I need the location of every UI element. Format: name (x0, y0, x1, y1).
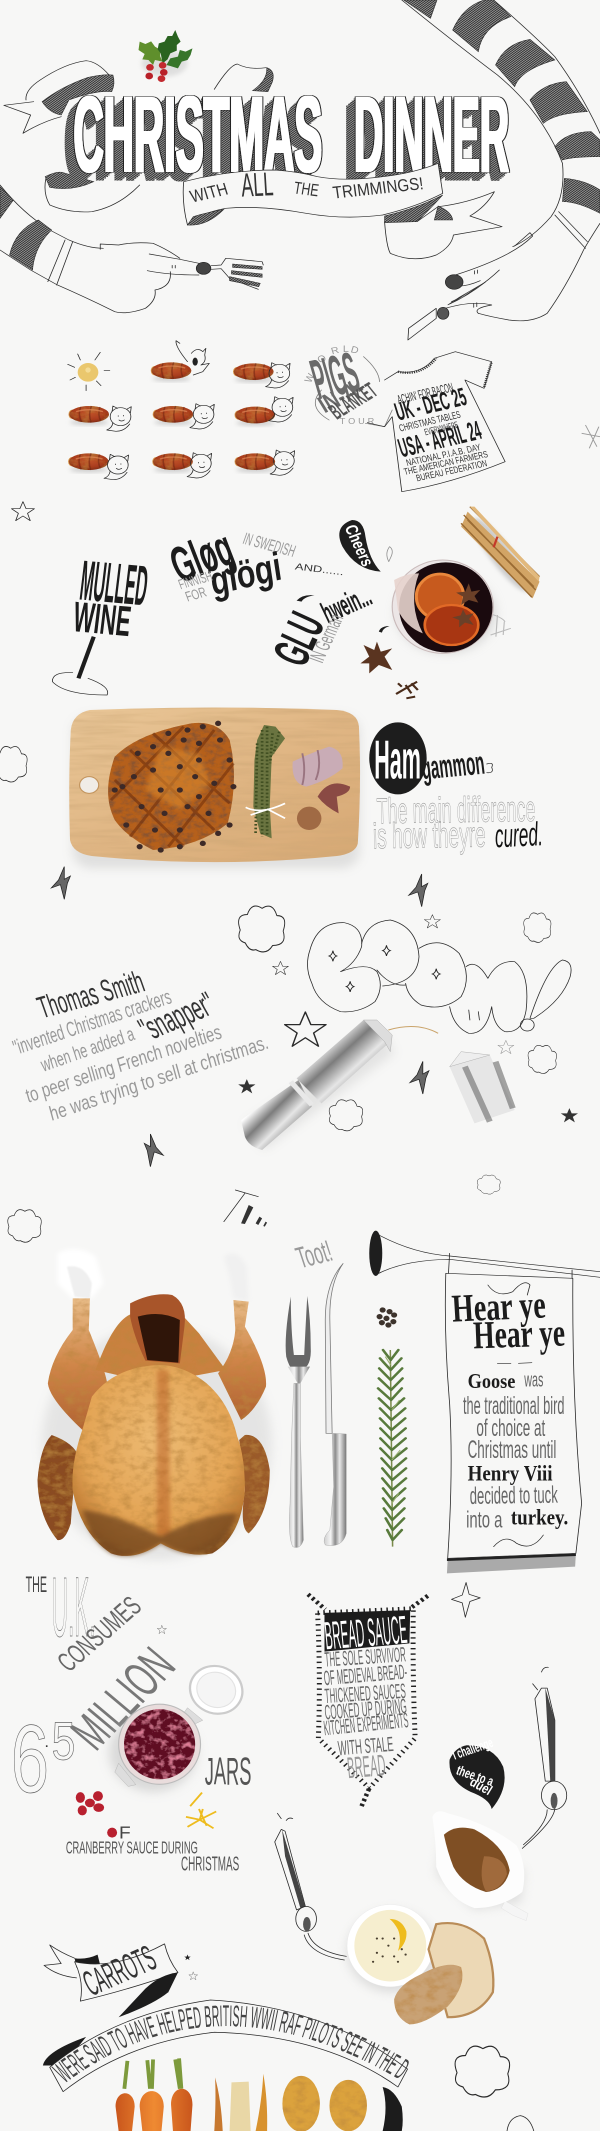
title (64, 95, 510, 182)
bread sauce banner: BREAD (346, 1748, 387, 1785)
Thomas Smith text: Thomas Smith (33, 964, 149, 1025)
world tour badge: D (349, 345, 360, 356)
doodle star (11, 502, 34, 521)
challenge speech bubble: duel (467, 1774, 495, 1798)
glog and glogi lettering: Gløg (160, 520, 243, 594)
Thomas Smith text: "snapper" (132, 985, 222, 1048)
carving knife (324, 1263, 346, 1546)
cracker end piece (450, 1052, 515, 1123)
pig in blanket 1 (151, 341, 209, 381)
pig in blanket 5 (235, 397, 293, 426)
t-shirt with dates: EVERYWHERE (423, 420, 460, 438)
proclamation scroll: Hear ye (451, 1283, 547, 1331)
gluhwein lettering (262, 579, 390, 672)
challenge speech bubble (449, 1734, 505, 1809)
t-shirt with dates: ACHIN' FOR BACON (395, 380, 455, 407)
carrots arc ribbon (42, 2000, 409, 2131)
UK consumes statistic: U.K. (52, 1561, 96, 1655)
rosemary sprig (378, 1350, 406, 1547)
gluhwein lettering: IN German (305, 612, 349, 666)
world tour badge: IN-A- (313, 376, 370, 418)
UK consumes statistic: CHRISTMAS (181, 1852, 239, 1875)
subtitle ribbon: WITH (187, 179, 230, 206)
world tour badge: BLANKET (324, 379, 383, 425)
Thomas Smith text: "invented Christmas crackers (8, 985, 175, 1059)
pig in blanket 6 (68, 453, 129, 480)
cheers speech drop: Cheers (340, 522, 377, 569)
lower left doodle cloud (0, 746, 27, 782)
holly sprig (139, 30, 192, 82)
gluhwein lettering: GLU (262, 607, 337, 672)
header section (0, 0, 600, 340)
world tour badge: O (316, 353, 329, 366)
toot lettering (224, 1190, 336, 1275)
cranberry, sauces and carrots section: THE SOLE SURVIVOR (324, 1643, 407, 1671)
UK consumes statistic: 6 (11, 1705, 49, 1813)
pig in blanket 7 (152, 453, 212, 478)
carrots (116, 2058, 192, 2131)
jar of cranberry sauce (109, 1656, 252, 1792)
UK consumes statistic (11, 1561, 251, 1875)
trumpet (369, 1231, 600, 1277)
peppercorns (380, 1310, 394, 1325)
ham and crackers section: cured. (494, 815, 544, 855)
bread sauce banner (308, 1594, 428, 1806)
proclamation scroll: turkey. (511, 1506, 568, 1530)
cranberry, sauces and carrots section (11, 1561, 568, 2131)
world tour badge: PIGS (304, 340, 366, 411)
world tour badge: R (330, 345, 340, 357)
right striped sleeve arm (402, 0, 600, 321)
ham and crackers section (0, 707, 578, 1167)
cranberry, sauces and carrots section: KITCHEN EXPERIMENTS (322, 1709, 410, 1740)
solid stars (238, 1079, 578, 1122)
glog and glogi lettering: FINNISH (176, 569, 215, 593)
world tour badge (303, 340, 392, 427)
t-shirt with dates: CHRISTMAS TABLES (398, 409, 462, 434)
challenge speech bubble: I challenge (450, 1734, 495, 1762)
BOOM lettering (307, 920, 571, 1033)
mulled wine glass lettering (52, 549, 151, 695)
lower right ribbon (385, 192, 502, 259)
glog and glogi lettering: AND...... (294, 562, 344, 578)
proclamation scroll (445, 1253, 582, 1573)
bread slices (394, 1923, 493, 2024)
turkey section (8, 1175, 600, 1573)
mulled wine glass lettering: WINE (71, 592, 134, 645)
pig in blanket 2 (233, 363, 290, 388)
right sword (522, 1667, 567, 1848)
mustard sun (68, 352, 110, 391)
orange zest star (186, 1793, 216, 1828)
proclamation scroll: Henry Viii (468, 1462, 553, 1486)
carrots ribbon (44, 1937, 198, 2017)
glog and glogi lettering (160, 520, 344, 605)
t-shirt with dates: THE AMERICAN FARMERS (403, 450, 489, 478)
Christmas cracker (241, 1020, 438, 1150)
pigs and mulled wine section: MULLED (77, 549, 151, 617)
subtitle ribbon: ALL (240, 166, 274, 204)
bread sauce bowl (347, 1905, 437, 1992)
glog and glogi lettering: IN SWEDISH (241, 529, 298, 561)
left hand holding fork (100, 243, 263, 289)
glog and glogi lettering: FOR (183, 584, 209, 605)
UK consumes statistic: F (119, 1822, 131, 1842)
world tour badge: TOUR (340, 417, 374, 426)
cranberry, sauces and carrots section: JARS (205, 1749, 251, 1793)
world tour badge: L (343, 345, 349, 355)
t-shirt with dates: BUREAU FEDERATION (415, 459, 488, 484)
carrots ribbon: CARROTS (76, 1937, 162, 2003)
cranberry, sauces and carrots section: THICKENED SAUCES (324, 1679, 407, 1708)
loose cranberries (76, 1791, 117, 1838)
doodle clouds (8, 1175, 500, 1242)
Thomas Smith text: he was trying to sell at christmas. (45, 1031, 272, 1125)
toot lettering: Toot! (292, 1234, 336, 1275)
left striped sleeve arm (0, 185, 170, 313)
upper left ribbon (4, 61, 114, 133)
pigs and mulled wine section (11, 340, 600, 698)
roast turkey (37, 1249, 272, 1560)
cinnamon sticks (461, 507, 540, 598)
proclamation scroll: Goose (468, 1369, 516, 1393)
glog and glogi lettering: glögi (203, 544, 288, 603)
star anise and cloves (360, 642, 418, 698)
cranberry, sauces and carrots section: COOKED UP DURING (324, 1695, 408, 1724)
main difference note (372, 789, 544, 857)
lightning bolt doodles (51, 867, 429, 1167)
mug of mulled wine (392, 560, 511, 653)
Thomas Smith text (8, 964, 272, 1125)
right hand holding knife (408, 233, 533, 340)
parsnips (214, 2074, 267, 2131)
subtitle ribbon: TRIMMINGS! (331, 173, 425, 202)
UK consumes statistic: MILLION (60, 1637, 186, 1760)
subtitle ribbon: THE (293, 178, 320, 200)
proclamation scroll: was (524, 1369, 543, 1391)
t-shirt with dates (367, 352, 505, 492)
Thomas Smith text: when he added a (37, 1024, 138, 1076)
UK consumes statistic: THE (26, 1572, 47, 1597)
ham gammon lettering: Ham (374, 728, 421, 790)
snowflake (582, 425, 600, 448)
subtitle ribbon (183, 163, 443, 225)
Thomas Smith text: to peer selling French novelties (21, 1021, 225, 1107)
cranberry, sauces and carrots section: OF MEDIEVAL BREAD- (323, 1660, 408, 1690)
ham on chopping board (69, 707, 360, 868)
world tour badge: W (303, 372, 318, 385)
carving fork (286, 1296, 311, 1547)
lower left ribbon (45, 172, 140, 212)
cheers speech drop (339, 520, 392, 572)
gluhwein lettering: hwein... (314, 579, 378, 629)
gravy boat (432, 1811, 528, 1921)
UK consumes statistic: CONSUMES (51, 1591, 147, 1677)
pig in blanket 8 (235, 450, 295, 475)
pig in blanket 4 (153, 404, 214, 429)
sparkle star (452, 1583, 480, 1617)
challenge speech bubble: thee to a (454, 1762, 496, 1789)
t-shirt with dates: NATIONAL P.I.A.B. DAY (405, 443, 482, 469)
doodle clouds (455, 2046, 534, 2131)
pig in blanket 3 (68, 406, 131, 431)
ham and crackers section: gammon (419, 745, 487, 787)
left sword (275, 1813, 346, 1960)
UK consumes statistic: 5 (52, 1711, 75, 1771)
proclamation scroll: into a (466, 1507, 502, 1533)
carrots arc ribbon: WERE SAID TO HAVE HELPED BRITISH WWII RAF PILOTS SEE IN THE DARK (52, 2005, 409, 2082)
UK consumes statistic: CRANBERRY SAUCE DURING (66, 1838, 198, 1858)
UK consumes statistic: . (44, 1734, 49, 1751)
roast potatoes (282, 2076, 367, 2131)
doodle clouds and stars (239, 906, 557, 1131)
t-shirt with dates: UK - DEC 25 (391, 382, 470, 426)
bread sauce banner: WITH STALE (337, 1733, 394, 1760)
upper middle ribbon (214, 64, 273, 92)
